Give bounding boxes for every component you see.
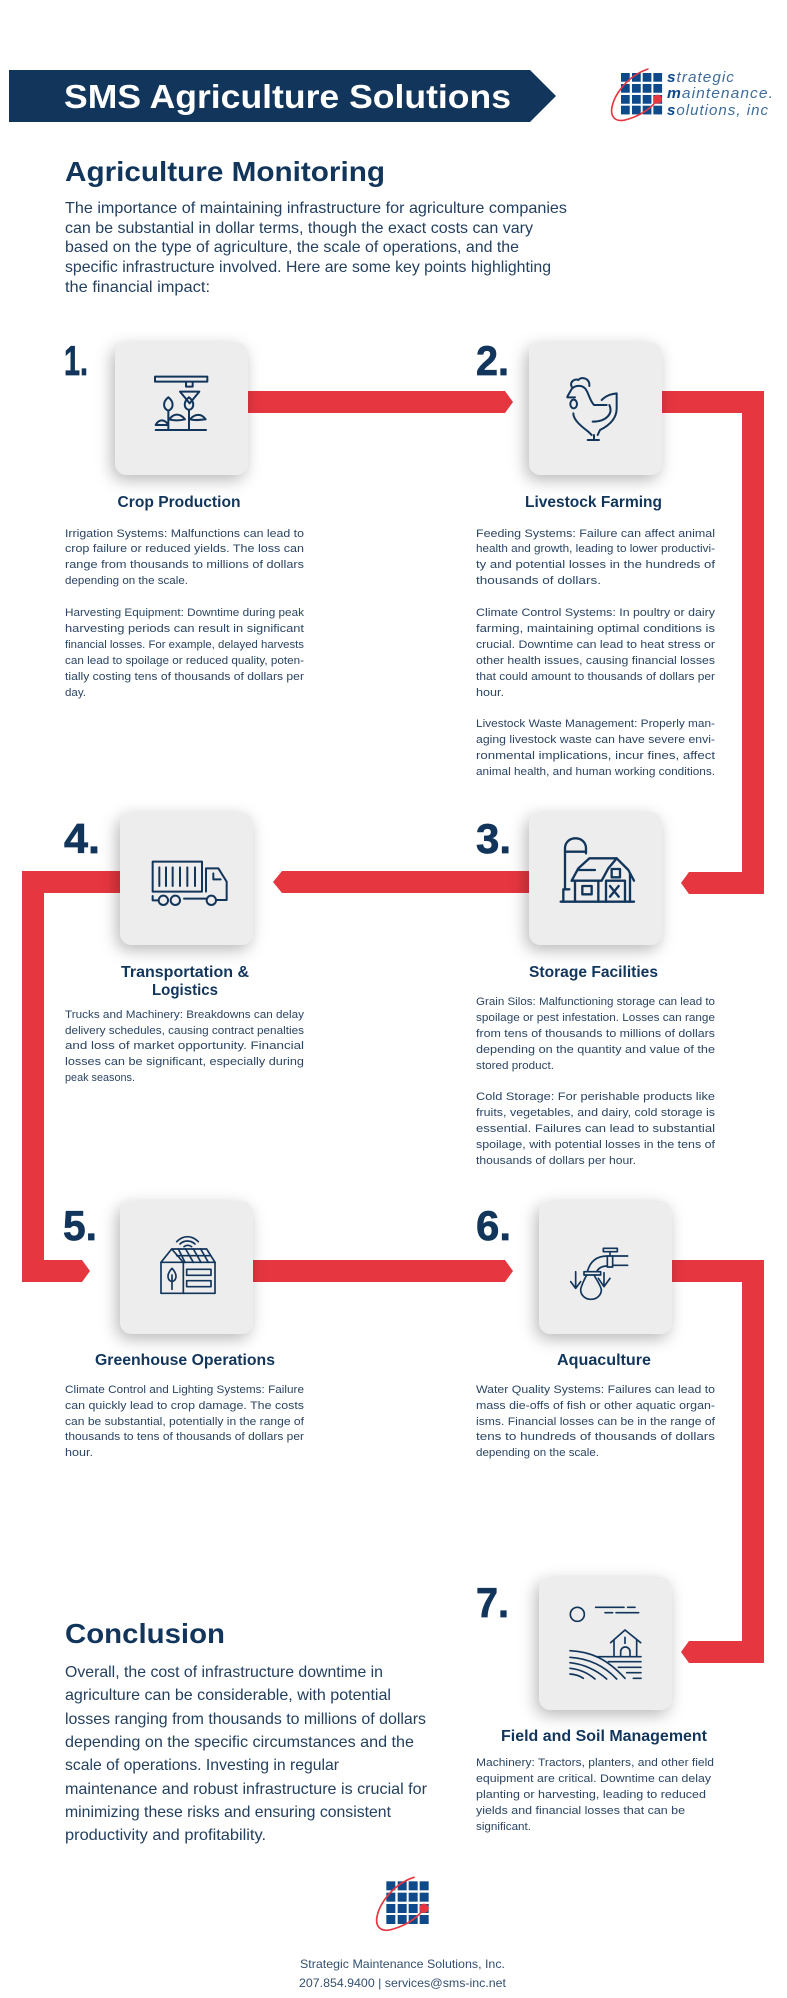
card 4 (120, 812, 253, 945)
number 3: 3. (476, 815, 511, 862)
body text: peak seasons. (65, 1072, 135, 1084)
body text: thousands of dollars. (476, 575, 601, 587)
number 6: 6. (476, 1202, 511, 1249)
body text: delivery schedules, causing contract penalties (65, 1025, 304, 1037)
conclusion paragraph: productivity and profitability. (65, 1827, 266, 1844)
panel: 3 storage facilities (476, 812, 716, 1167)
number 1: 1. (64, 337, 88, 384)
conclusion paragraph: scale of operations. Investing in regular (65, 1757, 340, 1774)
body text: Machinery: Tractors, planters, and other field (476, 1757, 714, 1769)
body text: significant. (476, 1821, 531, 1833)
body text: fruits, vegetables, and dairy, cold storage is (476, 1107, 715, 1119)
number 4: 4. (64, 815, 100, 862)
body text: ty and potential losses in the hundreds of (476, 559, 716, 571)
conclusion paragraph: agriculture can be considerable, with potential (65, 1687, 391, 1704)
number 2: 2. (476, 337, 509, 384)
conclusion paragraph: depending on the specific circumstances and the (65, 1734, 414, 1751)
card 3 (529, 812, 662, 945)
body text: and loss of market opportunity. Financial (65, 1040, 304, 1052)
panel: 1 crop production (64, 337, 305, 699)
body text (476, 1757, 714, 1833)
intro paragraph: The importance of maintaining infrastructure for agriculture companies (65, 200, 567, 217)
card 7 (539, 1577, 672, 1710)
body text: tially costing tens of thousands of dollars per (65, 671, 304, 683)
body text: Harvesting Equipment: Downtime during peak (65, 607, 304, 619)
body text (476, 996, 716, 1167)
body text: Feeding Systems: Failure can affect animal (476, 528, 715, 540)
body text: spoilage or pest infestation. Losses can range (476, 1012, 715, 1024)
label: Transportation & (121, 964, 249, 981)
conclusion paragraph: minimizing these risks and ensuring consistent (65, 1804, 392, 1821)
body text: health and growth, leading to lower productivi- (476, 543, 715, 555)
body text: financial losses. For example, delayed harvests (65, 639, 304, 651)
body text: Cold Storage: For perishable products like (476, 1091, 715, 1103)
panel: 4 transportation and logistics (64, 812, 304, 1084)
body text: thousands of dollars per hour. (476, 1155, 636, 1167)
body text: crop failure or reduced yields. The loss can (65, 543, 304, 555)
body text: tens to hundreds of thousands of dollars (476, 1431, 715, 1443)
body text: Irrigation Systems: Malfunctions can lead to (65, 528, 304, 540)
body text: crucial. Downtime can lead to heat stress or (476, 639, 715, 651)
label: Greenhouse Operations (95, 1352, 275, 1369)
footer logo (377, 1877, 429, 1930)
body text: planting or harvesting, leading to reduced (476, 1789, 706, 1801)
body text: harvesting periods can result in significant (65, 623, 305, 635)
body text: Trucks and Machinery: Breakdowns can delay (65, 1009, 304, 1021)
arrow: step 6 to step 7 (672, 1260, 764, 1663)
panel: 2 livestock farming (476, 337, 716, 778)
panel: 7 field and soil management (476, 1577, 714, 1833)
company logo top right: maintenance. (667, 85, 774, 102)
header banner: SMS Agriculture Solutions (64, 78, 511, 115)
intro paragraph: specific infrastructure involved. Here are some key points highlighting (65, 259, 551, 276)
conclusion paragraph: losses ranging from thousands to millions of dollars (65, 1711, 426, 1728)
arrow: step 1 to step 2 (248, 391, 513, 413)
body text: that could amount to thousands of dollars per (476, 671, 715, 683)
arrow: step 3 to step 4 (273, 871, 529, 893)
body text: Grain Silos: Malfunctioning storage can lead to (476, 996, 715, 1008)
body text: Water Quality Systems: Failures can lead to (476, 1384, 715, 1396)
label: Livestock Farming (525, 494, 662, 511)
body text: stored product. (476, 1060, 554, 1072)
body text: hour. (65, 1447, 93, 1459)
body text: range from thousands to millions of dollars (65, 559, 304, 571)
number 7: 7. (476, 1579, 509, 1626)
label: Crop Production (118, 494, 240, 511)
conclusion (65, 1618, 428, 1844)
body text (65, 1384, 305, 1459)
icon: truck (153, 862, 227, 905)
conclusion paragraph (65, 1664, 428, 1844)
card 5 (120, 1201, 253, 1334)
body text: animal health, and human working conditions. (476, 766, 715, 778)
icon: barn and silo (561, 838, 634, 902)
body text (476, 528, 716, 778)
company logo top right: solutions, inc (667, 102, 769, 119)
heading: Agriculture Monitoring: Agriculture Monitoring (65, 156, 385, 187)
body text: depending on the scale. (476, 1447, 599, 1459)
icon: chicken (567, 378, 617, 440)
body text: spoilage, with potential losses in the tens of (476, 1139, 716, 1151)
body text: Climate Control Systems: In poultry or dairy (476, 607, 715, 619)
body text: essential. Failures can lead to substantial (476, 1123, 715, 1135)
company logo top right: strategic (667, 69, 735, 86)
body text: depending on the quantity and value of the (476, 1044, 715, 1056)
body text: can be substantial, potentially in the range of (65, 1416, 305, 1428)
body text: from tens of thousands to millions of dollars (476, 1028, 715, 1040)
icon: tap and water drop (571, 1248, 628, 1299)
conclusion heading: Conclusion (65, 1618, 225, 1649)
header banner (9, 70, 556, 122)
footer contact text (299, 1957, 507, 1990)
body text: Livestock Waste Management: Properly man- (476, 718, 715, 730)
body text: mass die-offs of fish or other aquatic organ- (476, 1400, 715, 1412)
intro paragraph: the financial impact: (65, 279, 210, 296)
body text: ronmental implications, incur fines, affect (476, 750, 716, 762)
company logo top right (612, 69, 774, 120)
body text (476, 1384, 716, 1459)
body text: isms. Financial losses can be in the range of (476, 1416, 716, 1428)
body text: losses can be significant, especially during (65, 1056, 304, 1068)
body text: depending on the scale. (65, 575, 188, 587)
body text: other health issues, causing financial losses (476, 655, 715, 667)
body text: day. (65, 687, 86, 699)
body text: yields and financial losses that can be (476, 1805, 685, 1817)
label: Storage Facilities (529, 964, 658, 981)
card 1 (115, 342, 248, 475)
label: Logistics (152, 982, 218, 999)
body text: equipment are critical. Downtime can delay (476, 1773, 711, 1785)
conclusion paragraph: maintenance and robust infrastructure is crucial for (65, 1781, 428, 1798)
body text: hour. (476, 687, 504, 699)
icon: irrigated plants (155, 377, 207, 430)
conclusion paragraph: Overall, the cost of infrastructure downtime in (65, 1664, 383, 1681)
card 6 (539, 1201, 672, 1334)
arrow: step 5 to step 6 (253, 1260, 513, 1282)
footer contact text: Strategic Maintenance Solutions, Inc. (300, 1957, 505, 1971)
body text (65, 1009, 304, 1084)
arrow: step 4 to step 5 (22, 871, 120, 1282)
footer contact text: 207.854.9400 | services@sms-inc.net (299, 1976, 507, 1990)
icon: smart greenhouse (161, 1237, 215, 1293)
body text (65, 528, 305, 699)
body text: thousands to tens of thousands of dollars per (65, 1431, 304, 1443)
label (121, 964, 249, 999)
body text: aging livestock waste can have severe envi- (476, 734, 715, 746)
card 2 (529, 342, 662, 475)
intro paragraph: can be substantial in dollar terms, though the exact costs can vary (65, 220, 533, 237)
body text: can quickly lead to crop damage. The costs (65, 1400, 304, 1412)
intro paragraph (65, 200, 567, 296)
number 5: 5. (63, 1202, 97, 1249)
body text: farming, maintaining optimal conditions is (476, 623, 715, 635)
icon: field and farmhouse (570, 1607, 641, 1679)
panel: 5 greenhouse operations (63, 1201, 305, 1459)
panel: 6 aquaculture (476, 1201, 716, 1459)
intro paragraph: based on the type of agriculture, the scale of operations, and the (65, 239, 519, 256)
label: Aquaculture (557, 1352, 651, 1369)
body text: Climate Control and Lighting Systems: Failure (65, 1384, 304, 1396)
arrow: step 2 to step 3 (662, 391, 764, 894)
label: Field and Soil Management (501, 1728, 707, 1745)
body text: can lead to spoilage or reduced quality, poten- (65, 655, 304, 667)
